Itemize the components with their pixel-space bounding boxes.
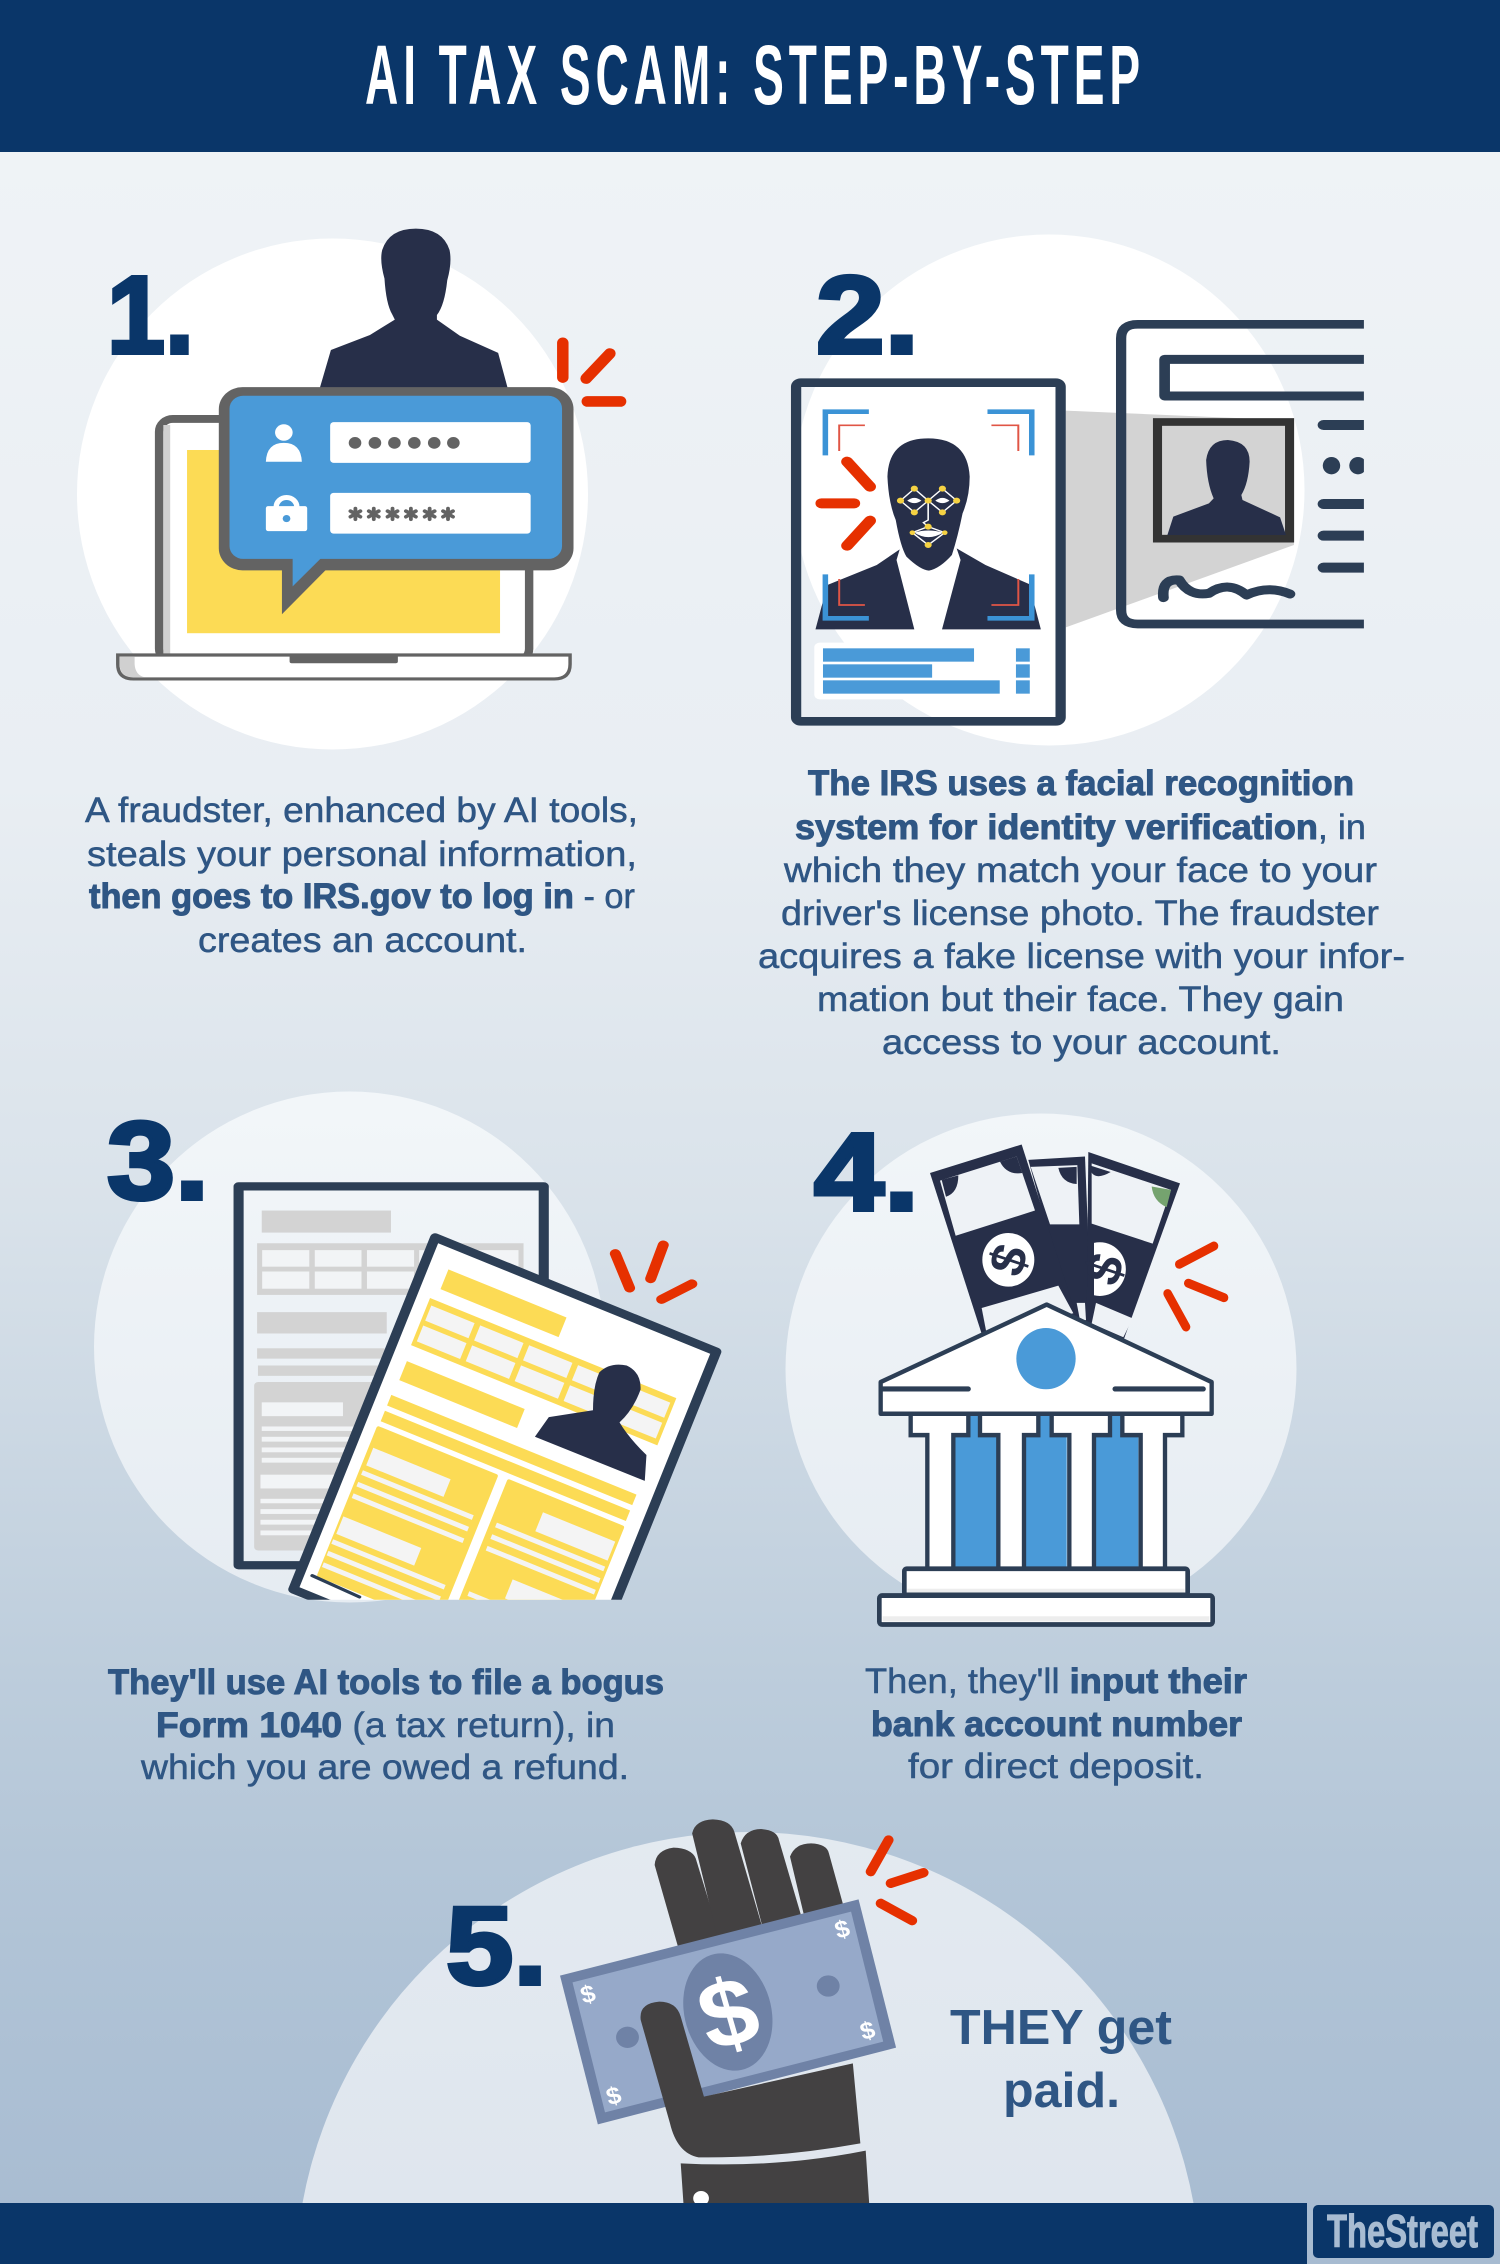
illustration: tax forms — [234, 1182, 722, 1600]
circle backdrop 4 — [786, 1114, 1296, 1624]
step 3 text: Form 1040 (a tax return), in — [156, 1706, 615, 1745]
step 3 text: They'll use AI tools to file a bogus — [108, 1663, 664, 1702]
number 2: 2. — [816, 254, 919, 377]
step 4 text: Then, they'll input their — [865, 1662, 1247, 1701]
illustration: bank with cash: $ — [1074, 1246, 1135, 1292]
step 1 text: then goes to IRS.gov to log in - or — [89, 877, 635, 916]
step 2 text — [758, 764, 1405, 1062]
panel: step 1 — [77, 229, 638, 960]
step 4 text — [865, 1662, 1247, 1786]
circle backdrop 3 — [94, 1092, 605, 1602]
illustration: hand holding dollar bill — [560, 1819, 924, 2206]
step 1 text: steals your personal information, — [87, 835, 637, 874]
panel: step 2 — [758, 234, 1405, 1062]
step 3 text — [108, 1663, 664, 1787]
step 1 text: creates an account. — [198, 921, 527, 960]
illustration: face scan and driver's license — [796, 324, 1375, 721]
step 2 text: The IRS uses a facial recognition — [808, 764, 1354, 803]
panel: step 5 — [302, 1819, 1194, 2206]
number 5: 5. — [446, 1885, 547, 2008]
step 5 text: paid. — [1003, 2064, 1120, 2118]
illustration: hand holding dollar bill: $ — [603, 2081, 625, 2111]
step 1 text — [85, 791, 638, 960]
illustration: hand holding dollar bill: $ — [577, 1980, 599, 2009]
panel: step 4 — [786, 1111, 1296, 1786]
illustration: fraudster at laptop with login bubble — [118, 229, 621, 679]
circle backdrop 5 — [302, 1832, 1194, 2204]
number 4: 4. — [814, 1111, 919, 1234]
number 1: 1. — [107, 254, 194, 377]
illustration: hand holding dollar bill: $ — [857, 2016, 878, 2046]
step 4 text: for direct deposit. — [908, 1747, 1204, 1786]
step 5 text — [950, 2001, 1172, 2118]
step 2 text: mation but their face. They gain — [817, 980, 1344, 1019]
illustration: bank with cash — [879, 1144, 1224, 1625]
circle backdrop 1 — [77, 238, 588, 750]
step 2 text: driver's license photo. The fraudster — [781, 894, 1379, 933]
step 5 text: THEY get — [950, 2001, 1172, 2055]
step 2 text: access to your account. — [882, 1023, 1281, 1062]
circle backdrop 2 — [794, 234, 1304, 746]
number 3: 3. — [107, 1100, 209, 1223]
step 2 text: which they match your face to your — [783, 851, 1377, 890]
step 2 text: system for identity verification , in — [795, 808, 1366, 847]
illustration: bank with cash: $ — [977, 1237, 1039, 1282]
illustration: hand holding dollar bill: $ — [832, 1915, 853, 1944]
title banner — [0, 0, 1500, 152]
step 2 text: acquires a fake license with your infor- — [758, 937, 1405, 976]
step 3 text: which you are owed a refund. — [140, 1748, 629, 1787]
footer bar — [0, 2203, 1494, 2264]
step 1 text: A fraudster, enhanced by AI tools, — [85, 791, 638, 830]
step 4 text: bank account number — [871, 1705, 1242, 1744]
illustration: hand holding dollar bill: $ — [686, 1955, 770, 2071]
panel: step 3 — [94, 1092, 716, 1787]
